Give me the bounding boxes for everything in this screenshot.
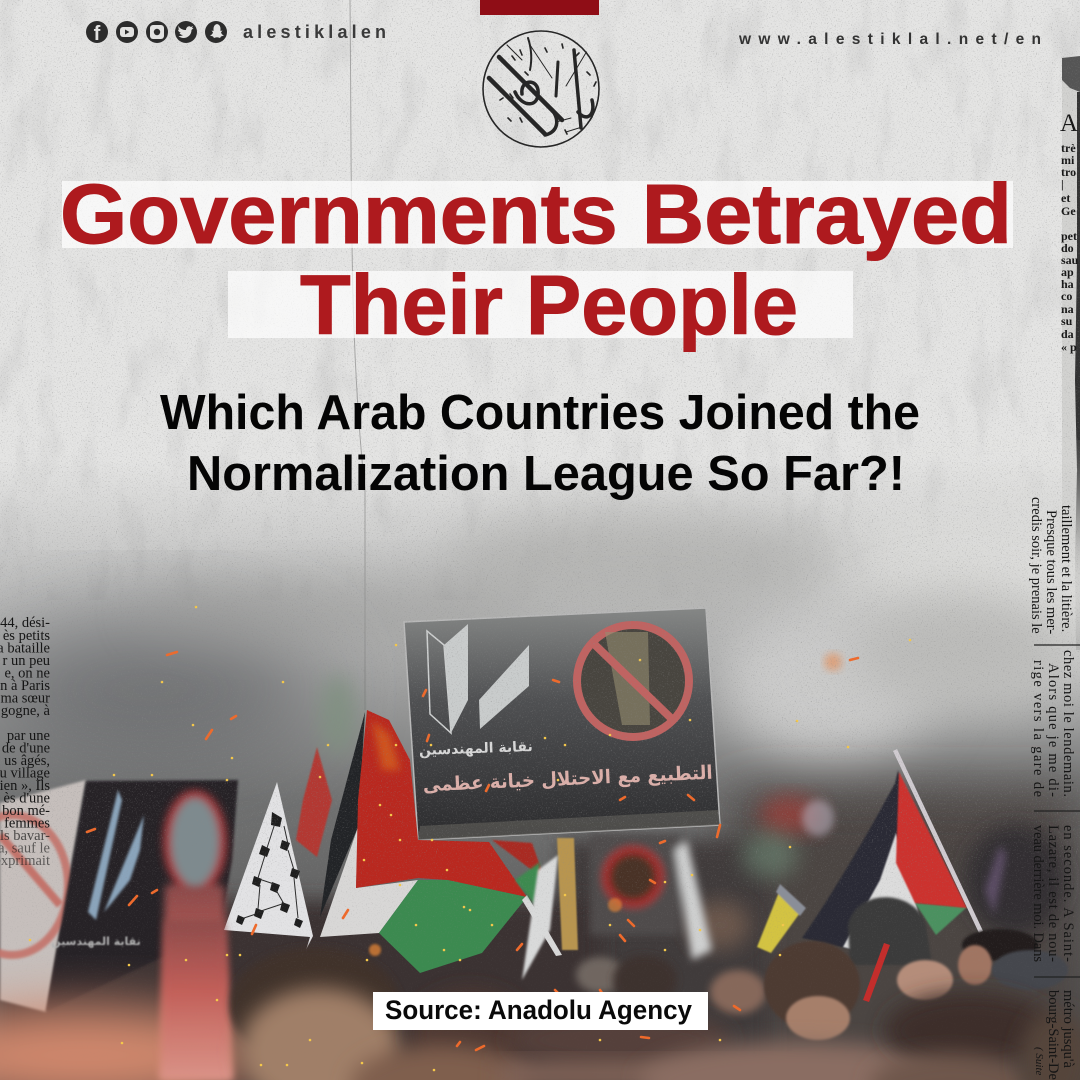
placard prohibition sign — [577, 625, 689, 737]
placard logo — [427, 624, 529, 733]
torn newspaper strip, upper right: | — [1061, 177, 1064, 191]
flag: red blurred rear — [296, 747, 332, 857]
rotated newspaper columns, right: métro jusqu'à — [1060, 990, 1076, 1068]
icon: snapchat — [205, 21, 227, 43]
icon: facebook: f — [94, 23, 101, 45]
placard slogan: نقابة المهندسين — [419, 739, 533, 759]
social handle: alestiklalen — [243, 22, 386, 42]
newspaper column, left: ès petits — [3, 628, 50, 644]
logo emblem — [483, 31, 599, 147]
torn newspaper strip, upper right: tro — [1061, 165, 1076, 179]
subtitle: Which Arab Countries Joined the — [160, 386, 920, 440]
newspaper column, left: r un peu — [2, 653, 50, 669]
source label: Source: Anadolu Agency — [385, 995, 692, 1025]
paper crease — [350, 0, 365, 710]
title: Their People — [300, 258, 798, 352]
pale flag right of main flag — [522, 855, 558, 980]
ghost flag in fog — [324, 676, 356, 732]
calligraphic strokes — [489, 38, 596, 135]
icon: instagram — [146, 21, 168, 43]
subtitle — [160, 386, 920, 501]
blurred side placards: نقابة المهندسين — [51, 935, 141, 948]
flag: main Palestinian flag — [320, 710, 562, 973]
placard slogan: التطبيع مع الاحتلال خيانة عظمى — [422, 762, 713, 796]
newspaper column, left: bon mé- — [2, 803, 50, 819]
rotated newspaper columns, right: credis soir, je prenais le — [1028, 497, 1044, 634]
rotated newspaper columns, right: taillement et la litière. — [1058, 505, 1074, 632]
torn newspaper strip, upper right: trè — [1061, 141, 1076, 155]
torn newspaper strip, upper right: da — [1061, 327, 1074, 341]
paper grain — [0, 0, 1080, 560]
rotated newspaper columns, right: Alors que je me di- — [1045, 663, 1061, 797]
newspaper column, left: ès d'une — [3, 790, 50, 806]
website url: www.alestiklal.net/en — [738, 31, 1041, 48]
newspaper column, left: e, on ne — [4, 666, 50, 682]
torn newspaper strip, upper right: do — [1061, 241, 1074, 255]
newspaper column, left: n à Paris — [0, 678, 50, 694]
blurred side placards — [0, 780, 238, 1012]
blurred pink pole with ring — [160, 794, 232, 1080]
torn newspaper strip, upper right: co — [1061, 289, 1072, 303]
photo grain — [0, 560, 1080, 972]
flag: yellow — [757, 884, 806, 953]
rotated newspaper columns, right: bourg-Saint-De — [1045, 990, 1061, 1080]
title highlight bars — [62, 181, 1013, 338]
rotated newspaper columns, right: Lazare, il est de nou- — [1045, 825, 1061, 962]
rotated newspaper columns, right: rige vers la gare de — [1030, 660, 1046, 797]
newspaper column, left: ma sœur — [0, 690, 50, 706]
newspaper column, left: de d'une — [2, 740, 50, 756]
flag: right Palestinian flag — [802, 750, 981, 955]
photo: protest crowd fading into the paper — [0, 460, 1080, 1080]
torn newspaper strip, upper right: ap — [1061, 265, 1074, 279]
social icons row — [86, 21, 227, 45]
torn newspaper strip, upper right: mi — [1061, 153, 1075, 167]
torn newspaper strip, upper right: na — [1061, 302, 1074, 316]
rotated newspaper columns, right: Presque tous les mer- — [1043, 510, 1059, 634]
torn newspaper strip, upper right: su — [1061, 314, 1073, 328]
keffiyeh flag — [224, 782, 313, 950]
icon: youtube — [116, 21, 138, 43]
torn newspaper strip, upper right: A — [1060, 110, 1078, 137]
torn newspaper strip, upper right: ha — [1061, 277, 1074, 291]
placard slogan — [419, 739, 713, 796]
blurred crowd — [0, 790, 1080, 1080]
top red tab — [480, 0, 599, 15]
newspaper column, left — [0, 615, 51, 869]
newspaper column, left: us âgés, — [4, 753, 50, 769]
rotated newspaper columns, right — [1028, 497, 1080, 1080]
newspaper column, left: ls bavar- — [0, 828, 50, 844]
torn newspaper strip, upper right: Ge — [1061, 204, 1076, 218]
foreground blurred heads — [0, 920, 1080, 1080]
rotated newspaper columns, right: ( Suite — [1033, 1047, 1045, 1076]
title: Governments Betrayed — [60, 167, 1012, 261]
newspaper column, left: 44, dési- — [0, 615, 50, 631]
torn newspaper strip, upper right: « p — [1061, 340, 1077, 354]
torn newspaper strip, upper right — [1060, 56, 1080, 650]
rotated newspaper columns, right: en seconde. A Saint- — [1060, 825, 1076, 962]
icon: twitter — [175, 21, 197, 43]
icon: facebook — [86, 21, 108, 45]
torn newspaper strip, upper right: pet — [1061, 229, 1077, 243]
embers — [30, 607, 910, 1070]
title — [60, 167, 1013, 352]
wooden pole — [557, 838, 578, 950]
torn newspaper strip, upper right: et — [1061, 191, 1070, 205]
newspaper column, left: par une — [7, 728, 50, 744]
small no-sign behind the placard — [590, 835, 712, 960]
rotated newspaper columns, right: veau derrière moi. Dans — [1030, 825, 1046, 962]
rotated newspaper columns, right: chez moi le lendemain. — [1060, 650, 1076, 797]
heads right — [576, 897, 1068, 1040]
torn newspaper strip, upper right: sau — [1061, 253, 1079, 267]
subtitle: Normalization League So Far?! — [187, 447, 905, 501]
placard: large with no-normalization slogan — [404, 608, 720, 840]
newspaper column, left: gogne, à — [1, 703, 51, 719]
fog backdrop — [0, 460, 1080, 1080]
